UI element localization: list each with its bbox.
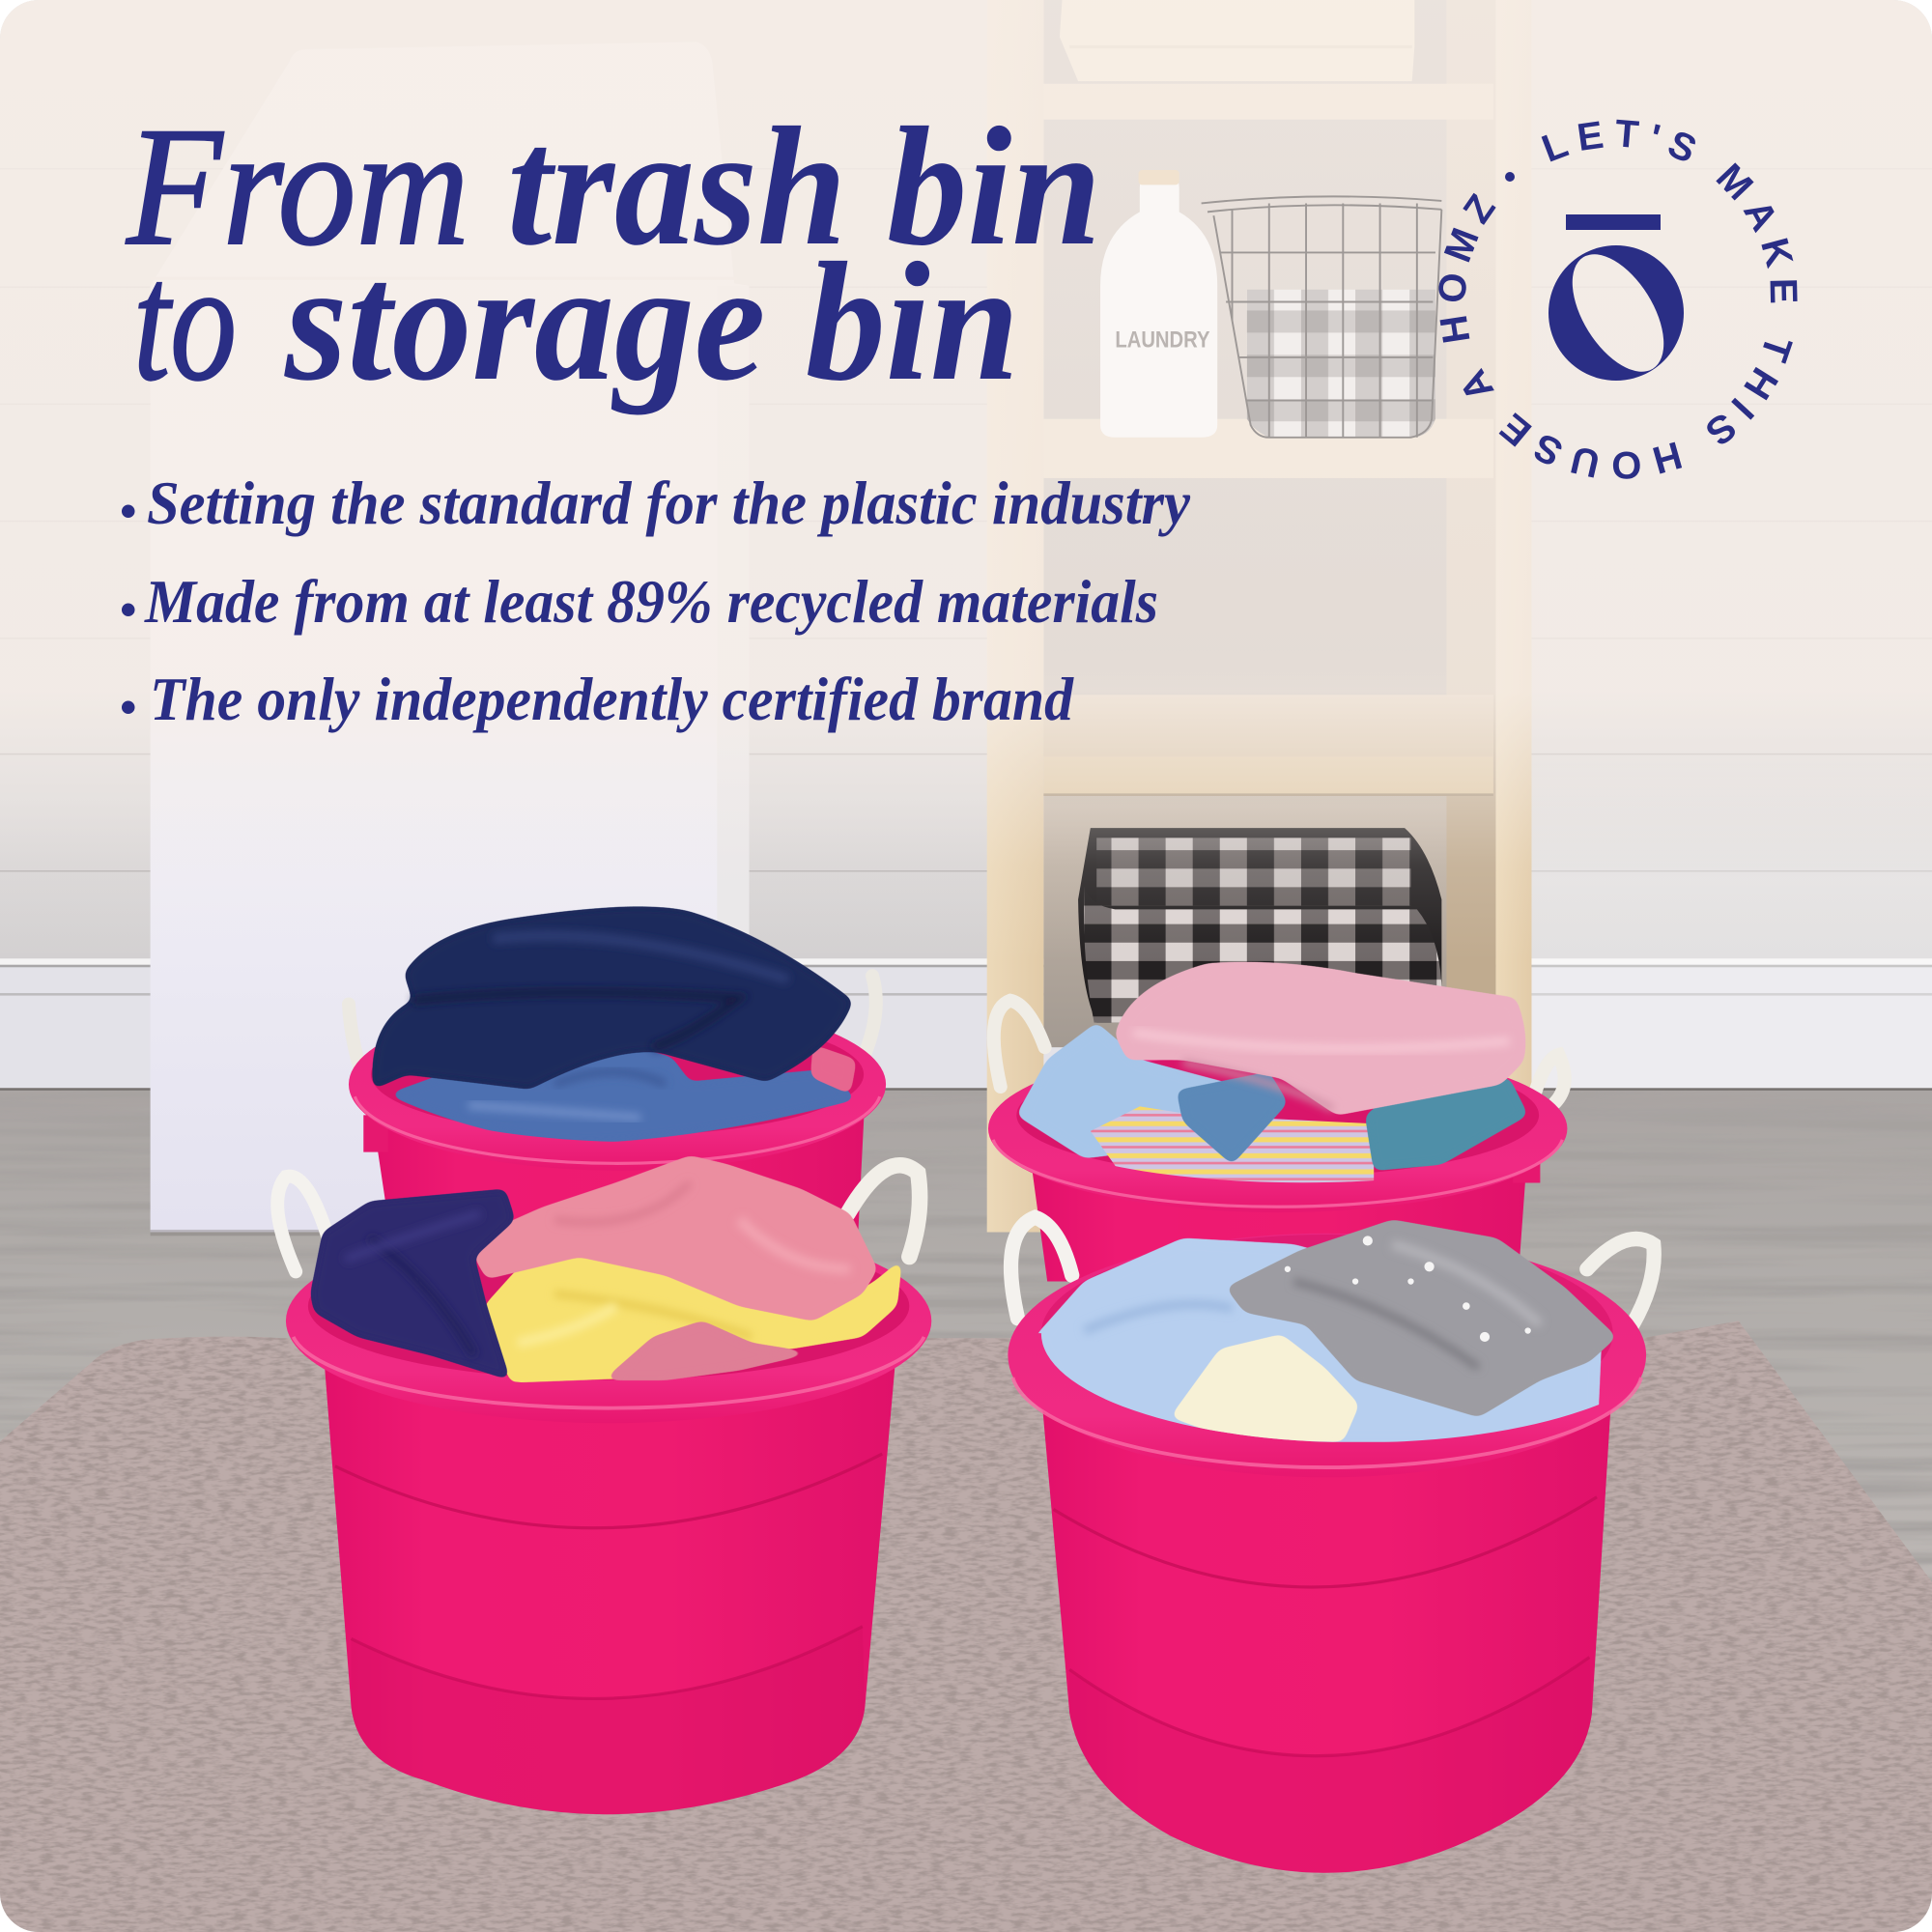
fade overlay bbox=[0, 0, 1932, 961]
rug bbox=[0, 1321, 1932, 1932]
clothes: blue scarf bbox=[1177, 1072, 1288, 1164]
bin: front right bbox=[1008, 1217, 1654, 1873]
clothes: gray shirt bbox=[1226, 1220, 1616, 1417]
heading line 1: From bbox=[126, 93, 469, 281]
bottle bbox=[1100, 170, 1217, 438]
bottle: LAUNDRY bbox=[1115, 327, 1210, 354]
clothes: white star dots bbox=[1285, 1236, 1531, 1342]
clothes: light blue shirt bbox=[1016, 1023, 1233, 1158]
baseboard bbox=[0, 958, 1932, 1092]
bin: back right bbox=[988, 962, 1567, 1282]
bin: back left bbox=[349, 907, 886, 1244]
heading line 1: trash bin bbox=[507, 93, 1101, 281]
icon: o with macron bbox=[1548, 214, 1684, 381]
clothes: pink scrap bbox=[811, 1047, 856, 1092]
bullet 2: • bbox=[120, 582, 137, 637]
clothes: yellow cloth bbox=[487, 1258, 900, 1383]
heading line 1 bbox=[126, 93, 1101, 281]
heading bbox=[126, 93, 1101, 416]
clothes: pink blouse bbox=[474, 1155, 877, 1321]
bullet 3: • bbox=[120, 680, 137, 734]
bullet 3: The only independently certified brand bbox=[150, 665, 1074, 733]
clothes: striped cloth bbox=[1091, 1106, 1374, 1182]
clothes: teal shirt bbox=[1365, 1078, 1528, 1171]
bullet 1: • bbox=[120, 484, 137, 538]
wire basket bbox=[1202, 196, 1441, 438]
folded towels on top shelf bbox=[1060, 0, 1414, 81]
heading line 2: to bbox=[133, 228, 237, 416]
clothes: cream cloth bbox=[1171, 1334, 1359, 1441]
clothes: rose cloth bbox=[604, 1321, 813, 1380]
wall bbox=[0, 0, 1932, 1096]
bullet list bbox=[120, 469, 1191, 734]
bin: front left bbox=[277, 1155, 931, 1814]
washing machine bbox=[151, 42, 750, 1236]
logo badge bbox=[1438, 120, 1798, 479]
gingham basket bbox=[1078, 828, 1441, 1023]
clothes: navy towel bbox=[373, 907, 853, 1090]
right wall brightening bbox=[1531, 739, 1932, 1088]
clothes: light blue base bbox=[1035, 1238, 1602, 1441]
shelving unit bbox=[987, 0, 1531, 1233]
circular slogan: LET'S MAKE THIS HOUSE A HOMZ bbox=[1438, 120, 1798, 479]
clothes: blue shirt bbox=[395, 1052, 852, 1142]
clothes: pink towel bbox=[1115, 962, 1525, 1115]
clothes: navy sweater bbox=[310, 1189, 515, 1380]
floor bbox=[0, 1091, 1932, 1583]
bullet 1: Setting the standard for the plastic industry bbox=[147, 469, 1191, 537]
heading line 2: storage bin bbox=[284, 228, 1019, 416]
bullet 2: Made from at least 89% recycled materials bbox=[144, 567, 1158, 636]
